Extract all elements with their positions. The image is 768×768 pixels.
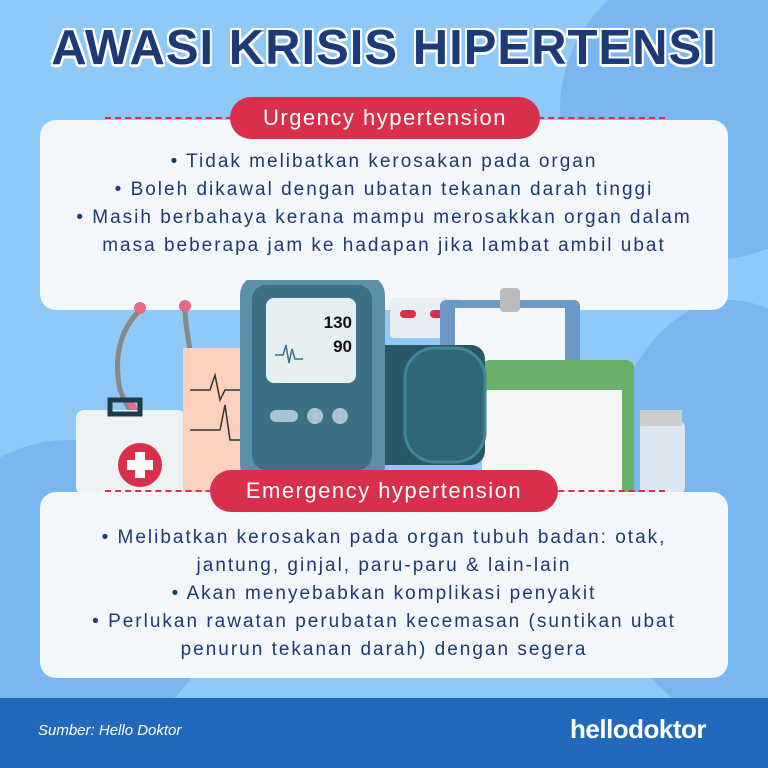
text: emergency bullets: • Perlukan rawatan perubatan kecemasan (suntikan ubat bbox=[92, 611, 676, 632]
logo: hellodoktor bbox=[570, 714, 706, 744]
text: emergency bullets: • Melibatkan kerosakan pada organ tubuh badan: otak, bbox=[102, 527, 666, 548]
cuff bbox=[355, 345, 485, 465]
blood pressure monitor: 130 bbox=[324, 313, 352, 332]
text: urgency bullets: • Boleh dikawal dengan ubatan tekanan darah tinggi bbox=[115, 179, 653, 200]
ECG paper bbox=[183, 348, 358, 495]
text: emergency bullets: penurun tekanan darah) dengan segera bbox=[181, 639, 587, 660]
calendar bbox=[482, 360, 634, 495]
panel: urgency bbox=[40, 120, 728, 310]
text: urgency bullets: • Masih berbahaya kerana mampu merosakkan organ dalam bbox=[76, 207, 692, 228]
heading: emergency bbox=[210, 470, 558, 512]
panel: emergency bbox=[40, 492, 728, 678]
title: AWASI KRISIS HIPERTENSI bbox=[51, 21, 717, 75]
background circles bbox=[560, 0, 768, 260]
text: emergency bullets bbox=[92, 527, 676, 660]
text: emergency bullets: • Akan menyebabkan komplikasi penyakit bbox=[172, 583, 596, 604]
pills + clipboard bbox=[390, 288, 580, 420]
heading: urgency bbox=[230, 97, 540, 139]
heading: emergency: Emergency hypertension bbox=[246, 478, 522, 503]
first aid kit bbox=[76, 400, 186, 495]
text: urgency bullets: masa beberapa jam ke hadapan jika lambat ambil ubat bbox=[102, 235, 666, 256]
text: urgency bullets bbox=[76, 151, 692, 256]
text: urgency bullets: • Tidak melibatkan kerosakan pada organ bbox=[171, 151, 597, 172]
jar bbox=[640, 410, 685, 495]
text: emergency bullets: jantung, ginjal, paru-paru & lain-lain bbox=[197, 555, 571, 576]
illustration: medical items bbox=[76, 280, 685, 492]
source: Sumber: Hello Doktor bbox=[38, 722, 181, 739]
blood pressure monitor bbox=[240, 275, 385, 495]
heading: urgency: Urgency hypertension bbox=[263, 105, 507, 130]
footer bbox=[0, 698, 768, 768]
blood pressure monitor: 90 bbox=[333, 337, 352, 356]
stethoscope bbox=[118, 300, 192, 460]
